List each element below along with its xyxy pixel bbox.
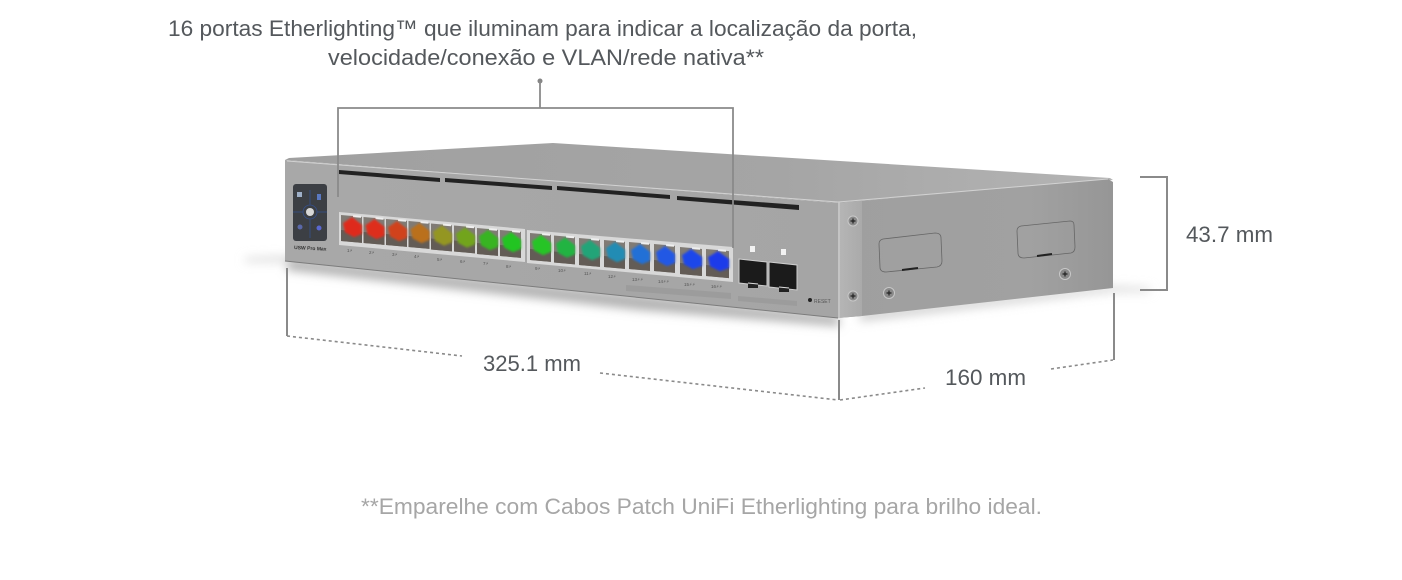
port number labels: 6⚡	[460, 259, 466, 264]
port number labels: 16⚡⚡	[711, 284, 722, 289]
device shadow	[245, 256, 1150, 326]
port number labels: 12⚡	[608, 274, 616, 279]
port number labels	[347, 248, 722, 289]
ventilation slots	[339, 170, 799, 210]
port number labels: 11⚡	[584, 271, 592, 276]
port number labels: 3⚡	[392, 252, 398, 257]
edge highlights	[287, 161, 1108, 318]
top face	[285, 143, 1113, 203]
callout heading: velocidade/conexão e VLAN/rede nativa**	[328, 45, 764, 70]
reset button: RESET	[814, 299, 831, 305]
port number labels: 13⚡⚡	[632, 277, 643, 282]
dimension: width: 325.1 mm	[483, 351, 581, 376]
port number labels: 10⚡	[558, 268, 566, 273]
port number labels: 1⚡	[347, 248, 353, 253]
side face	[838, 179, 1113, 318]
model label: USW Pro Max	[294, 245, 327, 253]
port group 1-8	[339, 212, 525, 262]
port number labels: 9⚡	[535, 266, 541, 271]
dimension: depth	[840, 293, 1114, 400]
port number labels: 8⚡	[506, 264, 512, 269]
footnote: **Emparelhe com Cabos Patch UniFi Etherlighting para brilho ideal.	[361, 494, 1042, 519]
speed bars	[626, 285, 797, 306]
port number labels: 7⚡	[483, 261, 489, 266]
corner flange	[838, 201, 862, 318]
dimension: depth: 160 mm	[945, 365, 1026, 390]
callout heading	[168, 16, 917, 70]
status display	[293, 184, 327, 241]
port number labels: 14⚡⚡	[658, 279, 669, 284]
port number labels: 4⚡	[414, 254, 420, 259]
dimension: height: 43.7 mm	[1186, 222, 1273, 247]
port number labels: 5⚡	[437, 257, 443, 262]
flange screws	[848, 216, 1070, 301]
reset button	[808, 298, 831, 305]
dimension: width	[287, 268, 839, 400]
port group 9-16	[527, 230, 733, 282]
callout heading: 16 portas Etherlighting™ que iluminam para indicar a localização da porta,	[168, 16, 917, 41]
front bottom edge	[285, 261, 838, 318]
side cutouts	[879, 221, 1075, 272]
callout bracket	[338, 78, 733, 248]
SFP ports	[739, 246, 797, 292]
front face	[285, 160, 838, 318]
network switch	[285, 143, 1113, 318]
port number labels: 15⚡⚡	[684, 282, 695, 287]
dimension: height	[1140, 177, 1273, 290]
port number labels: 2⚡	[369, 250, 375, 255]
